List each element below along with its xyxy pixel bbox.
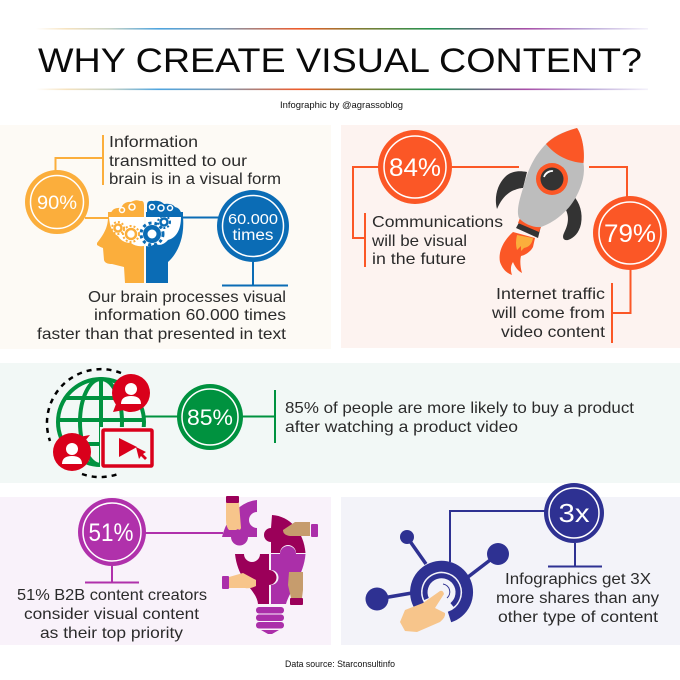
text: communications: will be visual [371, 233, 467, 250]
stat: 51% [78, 498, 146, 566]
text: brain processes [37, 289, 287, 343]
text: B2B creators: consider visual content [24, 606, 200, 623]
stat: 85%: 85% [187, 405, 233, 430]
panel: rocket [341, 125, 680, 348]
stat: 84% [378, 130, 452, 204]
connector lines: blue [182, 218, 288, 286]
icon: head with brain and gears [97, 200, 183, 283]
text: information transmitted: transmitted to our [109, 153, 248, 170]
text: infographics: Infographics get 3X [505, 571, 651, 588]
stat: 60.000 times [217, 190, 289, 262]
connector lines [145, 390, 275, 443]
text: communications [371, 214, 503, 268]
text: buy a product [285, 400, 635, 436]
text: buy a product: after watching a product video [285, 419, 518, 436]
stat: 90% [25, 170, 89, 234]
stat: 60.000 times: 60.000 [228, 211, 278, 228]
stat: 3x [544, 483, 604, 543]
stat: 79%: 79% [604, 220, 656, 248]
text: internet traffic: will come from [491, 305, 605, 322]
text: brain processes: faster than that presented in text [37, 326, 287, 343]
stat: 79% [593, 196, 667, 270]
connector lines [353, 167, 630, 343]
text: infographics [496, 571, 659, 626]
connector lines [85, 533, 223, 582]
connector lines: orange [56, 135, 110, 218]
stat: 85% [177, 384, 243, 450]
stat: 60.000 times: times [232, 227, 274, 244]
text: infographics: other type of content [498, 609, 659, 626]
text: B2B creators [17, 587, 207, 642]
panel: puzzle [0, 496, 331, 645]
text: communications: Communications [372, 214, 503, 231]
text: information transmitted [109, 134, 281, 188]
text: internet traffic [491, 286, 606, 341]
data source: Data source: Starconsultinfo [285, 659, 395, 670]
panel: video [0, 363, 680, 483]
icon: globe with users and video [47, 369, 156, 477]
icon: puzzle light bulb with hands [222, 496, 318, 634]
stat: 3x: 3x [558, 498, 590, 528]
title: WHY CREATE VISUAL CONTENT? [38, 42, 642, 80]
text: internet traffic: video content [501, 324, 606, 341]
panel: brain [0, 125, 331, 349]
text: B2B creators: as their top priority [40, 625, 183, 642]
text: information transmitted: Information [109, 134, 198, 151]
text: communications: in the future [372, 251, 466, 268]
icon: rocket [496, 128, 584, 275]
stat: 84%: 84% [389, 154, 441, 182]
text: B2B creators: 51% B2B content creators [17, 587, 207, 604]
panel: infographics [341, 483, 680, 645]
byline: Infographic by @agrassoblog [280, 100, 403, 111]
text: brain processes: information 60.000 times [94, 307, 286, 324]
icon: touch network [366, 530, 509, 632]
text: internet traffic: Internet traffic [496, 286, 605, 303]
text: brain processes: Our brain processes visual [88, 289, 286, 306]
text: buy a product: 85% of people are more likely to buy a product [285, 400, 635, 417]
connector lines [450, 511, 602, 566]
text: infographics: more shares than any [496, 590, 659, 607]
text: information transmitted: brain is in a visual form [109, 171, 281, 188]
stat: 51%: 51% [88, 519, 134, 547]
stat: 90%: 90% [37, 193, 77, 214]
